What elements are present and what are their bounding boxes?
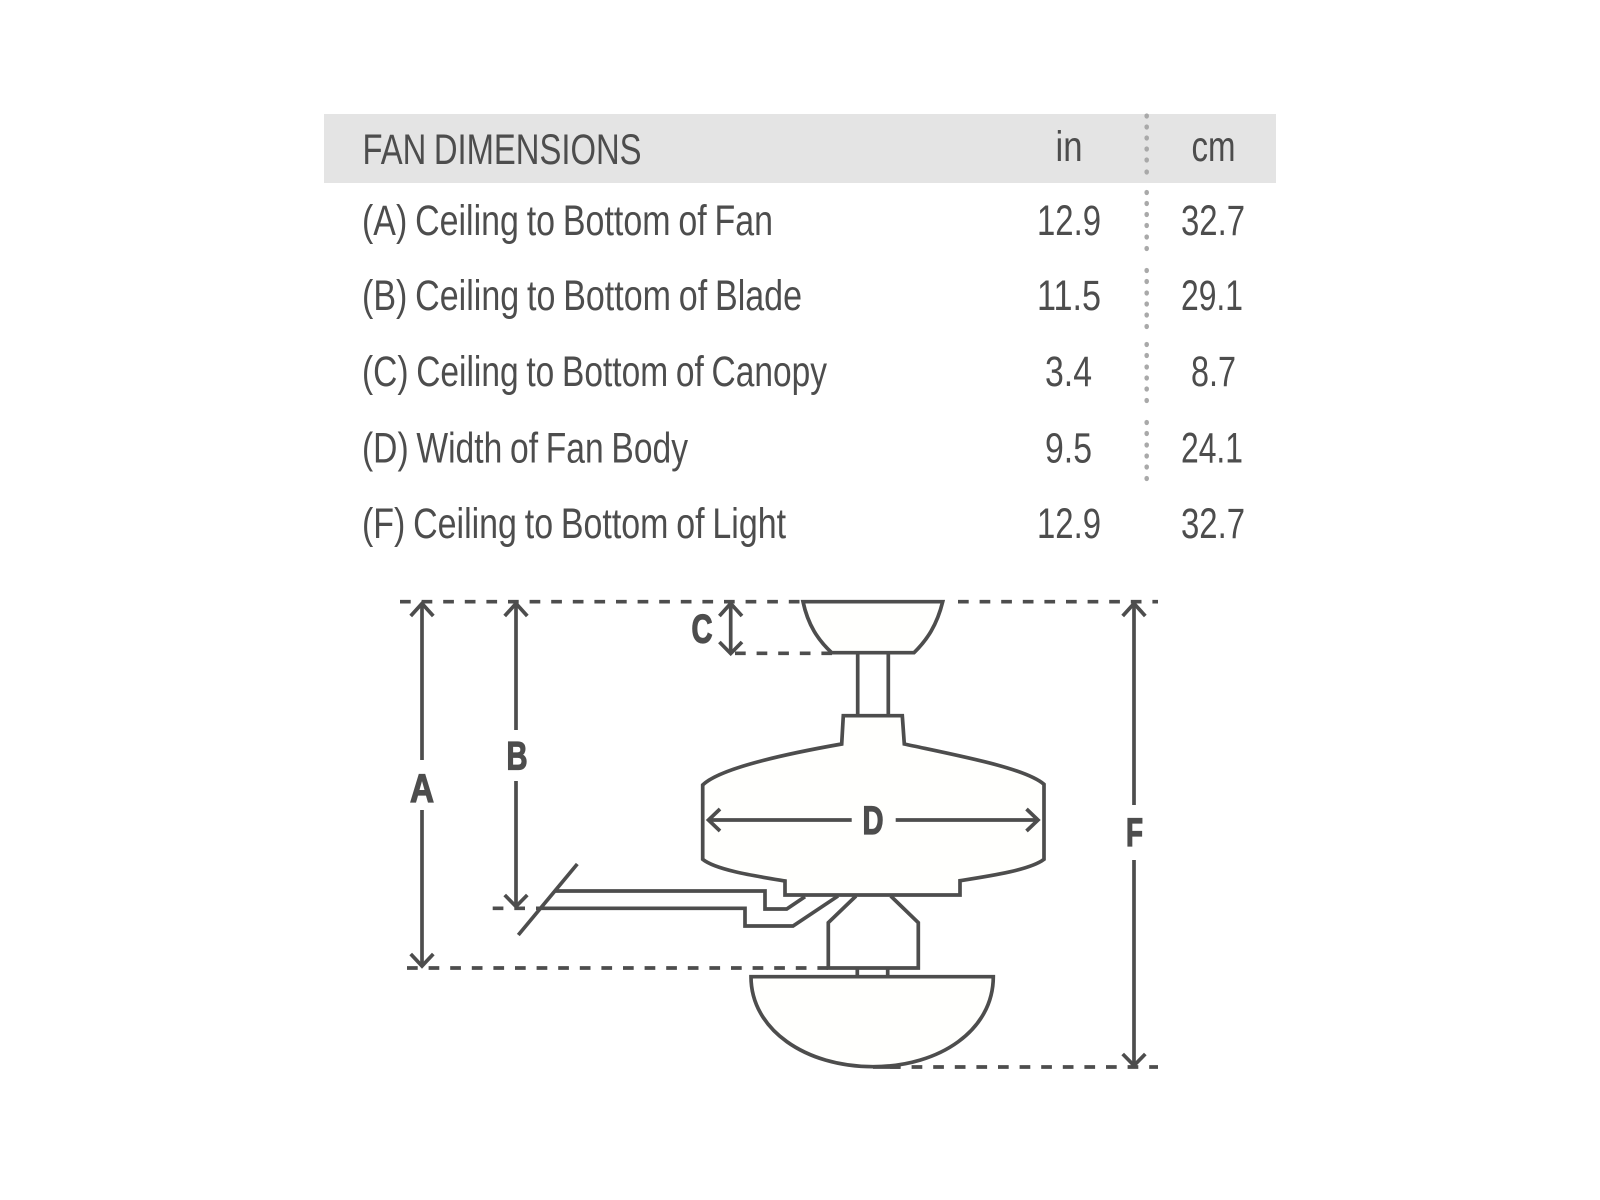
bowl base line xyxy=(873,1065,900,1069)
dimension C xyxy=(692,603,742,654)
dimension F: F xyxy=(1126,811,1143,855)
dimension A xyxy=(410,603,434,966)
dimension D: D xyxy=(862,799,884,843)
row A xyxy=(362,198,1245,245)
row B: 29.1 xyxy=(1181,273,1243,320)
row B: 11.5 xyxy=(1037,273,1101,320)
dimension F xyxy=(1123,603,1145,1066)
row D: 9.5 xyxy=(1045,426,1092,472)
row F: 12.9 xyxy=(1037,501,1101,548)
row A: 32.7 xyxy=(1181,198,1245,245)
row D xyxy=(362,426,1243,472)
fan blade xyxy=(518,864,838,935)
row C xyxy=(362,349,1236,396)
row F xyxy=(362,501,1245,548)
row D: (D) Width of Fan Body xyxy=(362,426,689,472)
dimension B xyxy=(505,603,528,906)
row A: 12.9 xyxy=(1037,198,1101,245)
row C: 3.4 xyxy=(1045,349,1092,396)
row B xyxy=(362,273,1243,320)
diagram: ceiling fan side view with dimensions xyxy=(400,602,1158,1067)
dimension B: B xyxy=(506,734,528,778)
row D: 24.1 xyxy=(1181,426,1243,472)
table: fan dimensions xyxy=(324,113,1276,548)
canopy xyxy=(803,602,943,653)
table header band: cm xyxy=(1192,124,1236,171)
motor body xyxy=(703,716,1044,895)
dashed reference lines xyxy=(400,602,1158,1067)
row B: (B) Ceiling to Bottom of Blade xyxy=(362,273,802,320)
table header band xyxy=(324,114,1276,183)
dimension A: A xyxy=(410,767,434,811)
row C: (C) Ceiling to Bottom of Canopy xyxy=(362,349,828,396)
row C: 8.7 xyxy=(1191,349,1236,396)
fan drawing xyxy=(518,602,1044,1067)
row A: (A) Ceiling to Bottom of Fan xyxy=(362,198,773,245)
light connector xyxy=(857,968,888,977)
dimension C: C xyxy=(692,608,712,652)
light bowl xyxy=(751,977,993,1067)
lower housing xyxy=(828,896,918,968)
row F: 32.7 xyxy=(1181,501,1245,548)
dotted column divider xyxy=(1144,113,1149,481)
table header band: in xyxy=(1056,124,1082,171)
table header band: FAN DIMENSIONS xyxy=(362,127,642,174)
dimension D xyxy=(708,799,1038,843)
downrod xyxy=(858,653,888,716)
row F: (F) Ceiling to Bottom of Light xyxy=(362,501,786,548)
